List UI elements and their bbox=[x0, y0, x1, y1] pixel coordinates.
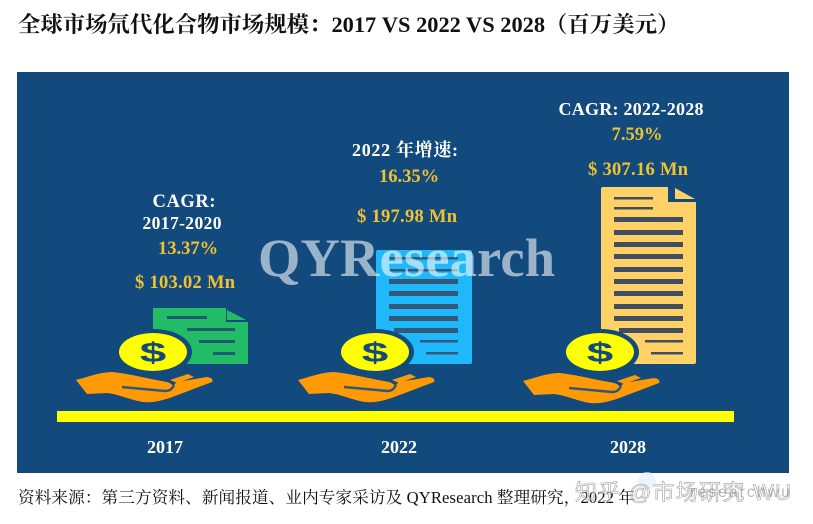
title: 全球市场氘代化合物市场规模：2017 VS 2022 VS 2028（百万美元） bbox=[18, 11, 679, 37]
text: 2017 CAGR label: CAGR: bbox=[152, 192, 216, 212]
icon: coin and hand bbox=[76, 329, 212, 402]
text: 2017 CAGR label: 2017-2020 bbox=[142, 213, 222, 233]
text: 2028 growth rate: 7.59% bbox=[612, 125, 662, 145]
source note: 资料来源：第三方资料、新闻报道、业内专家采访及 QYResearch 整理研究，2022 年 bbox=[18, 487, 635, 507]
text: 2017 market value: $ 103.02 Mn bbox=[135, 273, 236, 293]
text: year 2028: 2028 bbox=[610, 437, 646, 457]
icon: blue document bbox=[376, 250, 472, 364]
icon: coin and hand bbox=[298, 329, 434, 402]
panel: 2017 column bbox=[76, 192, 248, 457]
text: 2028 market value: $ 307.16 Mn bbox=[588, 160, 689, 180]
icon: coin and hand: $ bbox=[362, 338, 389, 368]
watermark: avatar circle bbox=[638, 472, 656, 490]
text: 2022 growth label: 2022 年增速: bbox=[352, 139, 458, 160]
watermark: zhihu account: 知乎 @市场研究 WU bbox=[575, 480, 791, 505]
watermark: QYResearch: QYResearch bbox=[258, 227, 555, 288]
icon: green document bbox=[153, 308, 248, 364]
timeline bar bbox=[57, 411, 734, 422]
icon: yellow document bbox=[601, 187, 696, 364]
icon: coin and hand: $ bbox=[140, 338, 167, 368]
panel: 2022 column bbox=[298, 139, 472, 457]
text: 2017 CAGR label bbox=[142, 192, 222, 233]
panel: chart background bbox=[17, 72, 789, 473]
icon: coin and hand bbox=[523, 329, 659, 403]
text: year 2017: 2017 bbox=[147, 437, 183, 457]
text: 2022 market value: $ 197.98 Mn bbox=[357, 207, 458, 227]
text: 2017 growth rate: 13.37% bbox=[158, 239, 218, 259]
text: 2022 growth rate: 16.35% bbox=[379, 167, 439, 187]
panel: 2028 column bbox=[523, 99, 704, 457]
watermark: wechat handle: researchwu bbox=[690, 484, 790, 501]
text: year 2022: 2022 bbox=[381, 437, 417, 457]
text: 2028 CAGR label: CAGR: 2022-2028 bbox=[558, 99, 704, 119]
icon: coin and hand: $ bbox=[587, 338, 614, 368]
